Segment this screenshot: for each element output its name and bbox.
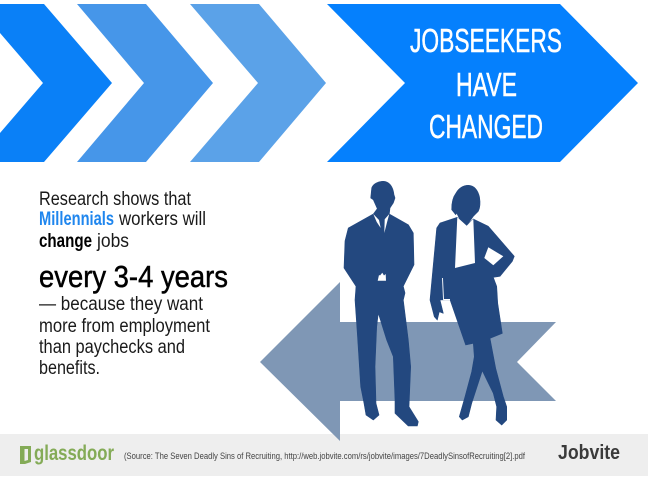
chevron 3 — [190, 4, 326, 162]
body text block: workers will — [118, 209, 206, 230]
body text block: Millennials — [39, 209, 114, 230]
silhouettes — [344, 181, 514, 426]
title: JOBSEEKERS — [410, 22, 562, 59]
chevron 1 — [0, 4, 112, 162]
header arrow with title — [327, 4, 638, 162]
logo icon — [20, 446, 31, 464]
body text block: — because they want — [39, 294, 204, 315]
footer band — [0, 434, 648, 476]
left-pointing arrow — [260, 282, 556, 441]
body text block: Research shows that — [39, 189, 192, 210]
glassdoor logo — [20, 442, 114, 465]
body text block: than paychecks and — [39, 337, 185, 358]
body text block: more from employment — [39, 316, 211, 337]
body text block — [39, 189, 228, 379]
title: HAVE — [456, 66, 517, 103]
chevron 2 — [77, 4, 213, 162]
body text block: jobs — [96, 231, 129, 252]
body text block: every 3-4 years — [39, 259, 228, 294]
logo wordmark: glassdoor — [34, 442, 114, 465]
woman silhouette — [430, 185, 514, 425]
Jobvite logo: Jobvite — [558, 442, 620, 464]
source citation: (Source: The Seven Deadly Sins of Recruiting, http://web.jobvite.com/rs/jobvite/images/7DeadlySinsofRecruiting[2].pdf — [124, 451, 525, 461]
body text block: benefits. — [39, 358, 100, 379]
title — [410, 22, 562, 145]
title: CHANGED — [429, 108, 543, 145]
body text block: change — [39, 231, 92, 252]
man silhouette — [344, 181, 418, 426]
